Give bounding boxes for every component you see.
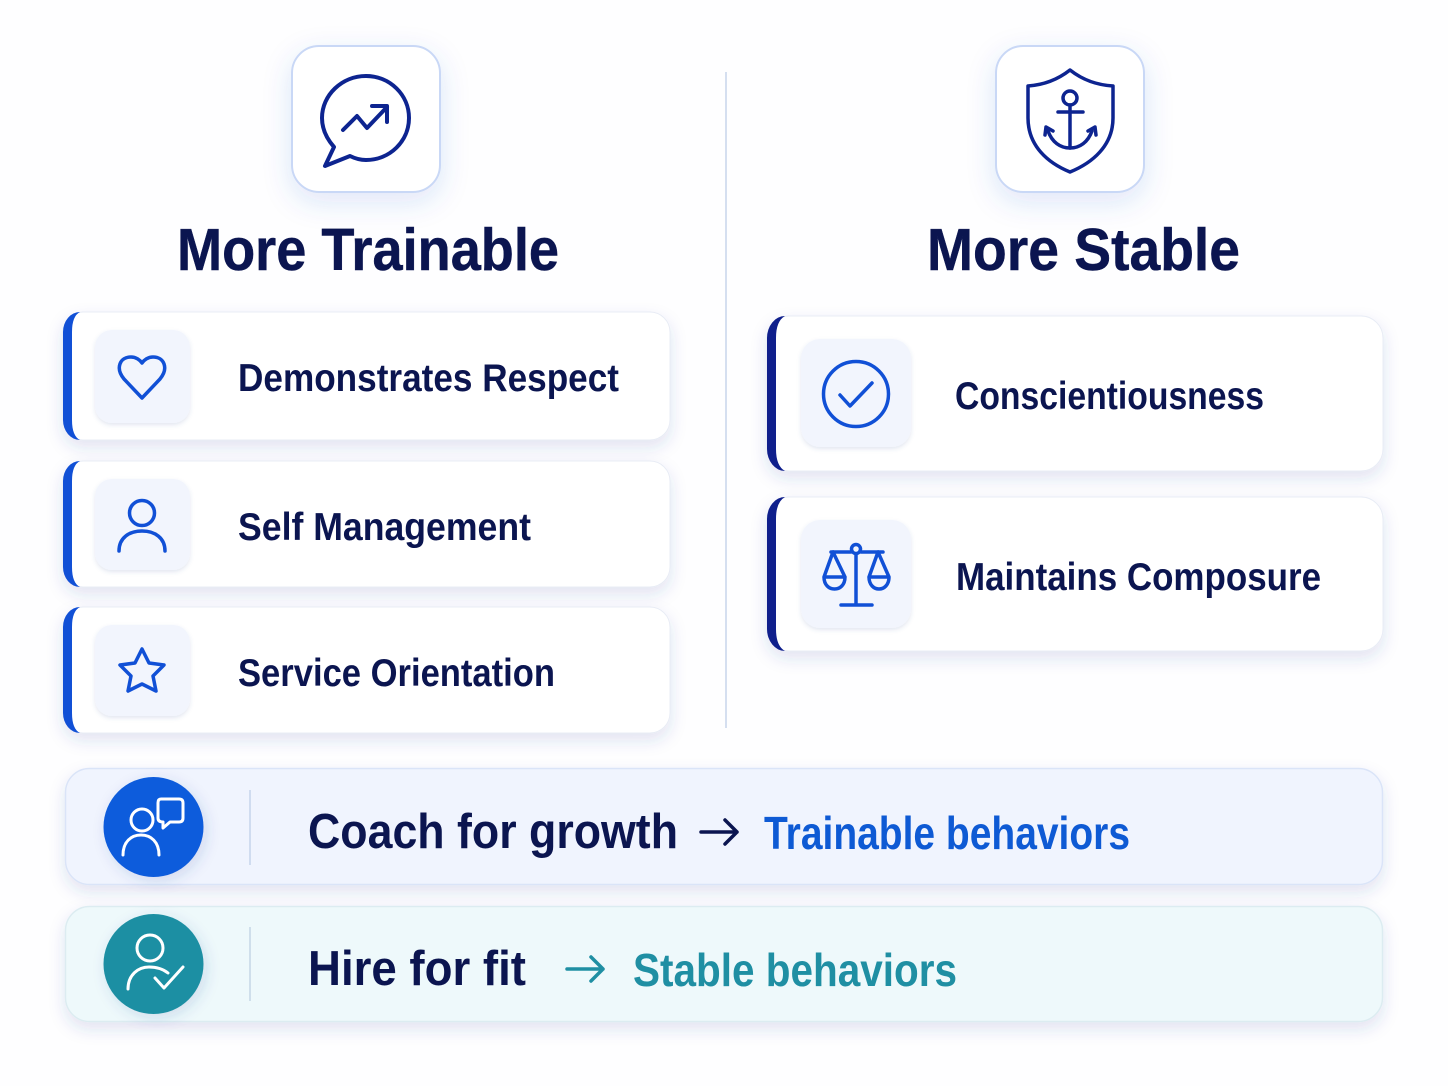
icon: balance scales (824, 544, 889, 605)
banner: Hire for fit: Stable behaviors (633, 944, 957, 996)
banner: Hire for fit (66, 906, 1382, 1022)
icon: chat bubble with trend arrow (292, 46, 440, 192)
card: Demonstrates Respect: Demonstrates Respect (238, 357, 619, 400)
heading: More Stable: More Stable (927, 217, 1240, 283)
icon: star (120, 649, 164, 691)
icon: coach with speech bubble (104, 777, 204, 877)
center divider (725, 72, 727, 728)
card: Demonstrates Respect (63, 312, 670, 440)
card: Service Orientation (63, 607, 670, 733)
card: Conscientiousness: Conscientiousness (955, 375, 1264, 418)
card: Self Management (63, 461, 670, 587)
card: Maintains Composure (767, 497, 1383, 651)
card: Conscientiousness (767, 316, 1383, 471)
arrow (701, 820, 737, 844)
card: Self Management: Self Management (238, 506, 531, 549)
icon: person (119, 500, 165, 551)
icon: heart (119, 357, 165, 398)
icon: person with check (104, 914, 204, 1014)
icon: check circle (824, 362, 888, 426)
card: Service Orientation: Service Orientation (238, 652, 555, 695)
banner: Hire for fit: Hire for fit (308, 942, 526, 996)
banner: Coach for growth: Trainable behaviors (764, 807, 1130, 859)
heading: More Trainable: More Trainable (177, 217, 559, 283)
arrow (567, 957, 603, 981)
icon: shield with anchor (996, 46, 1144, 192)
column: More Stable (767, 46, 1383, 651)
banner: Coach for growth (66, 768, 1382, 884)
banner: Coach for growth: Coach for growth (308, 805, 678, 859)
column: More Trainable (63, 46, 670, 733)
card: Maintains Composure: Maintains Composure (956, 556, 1321, 599)
